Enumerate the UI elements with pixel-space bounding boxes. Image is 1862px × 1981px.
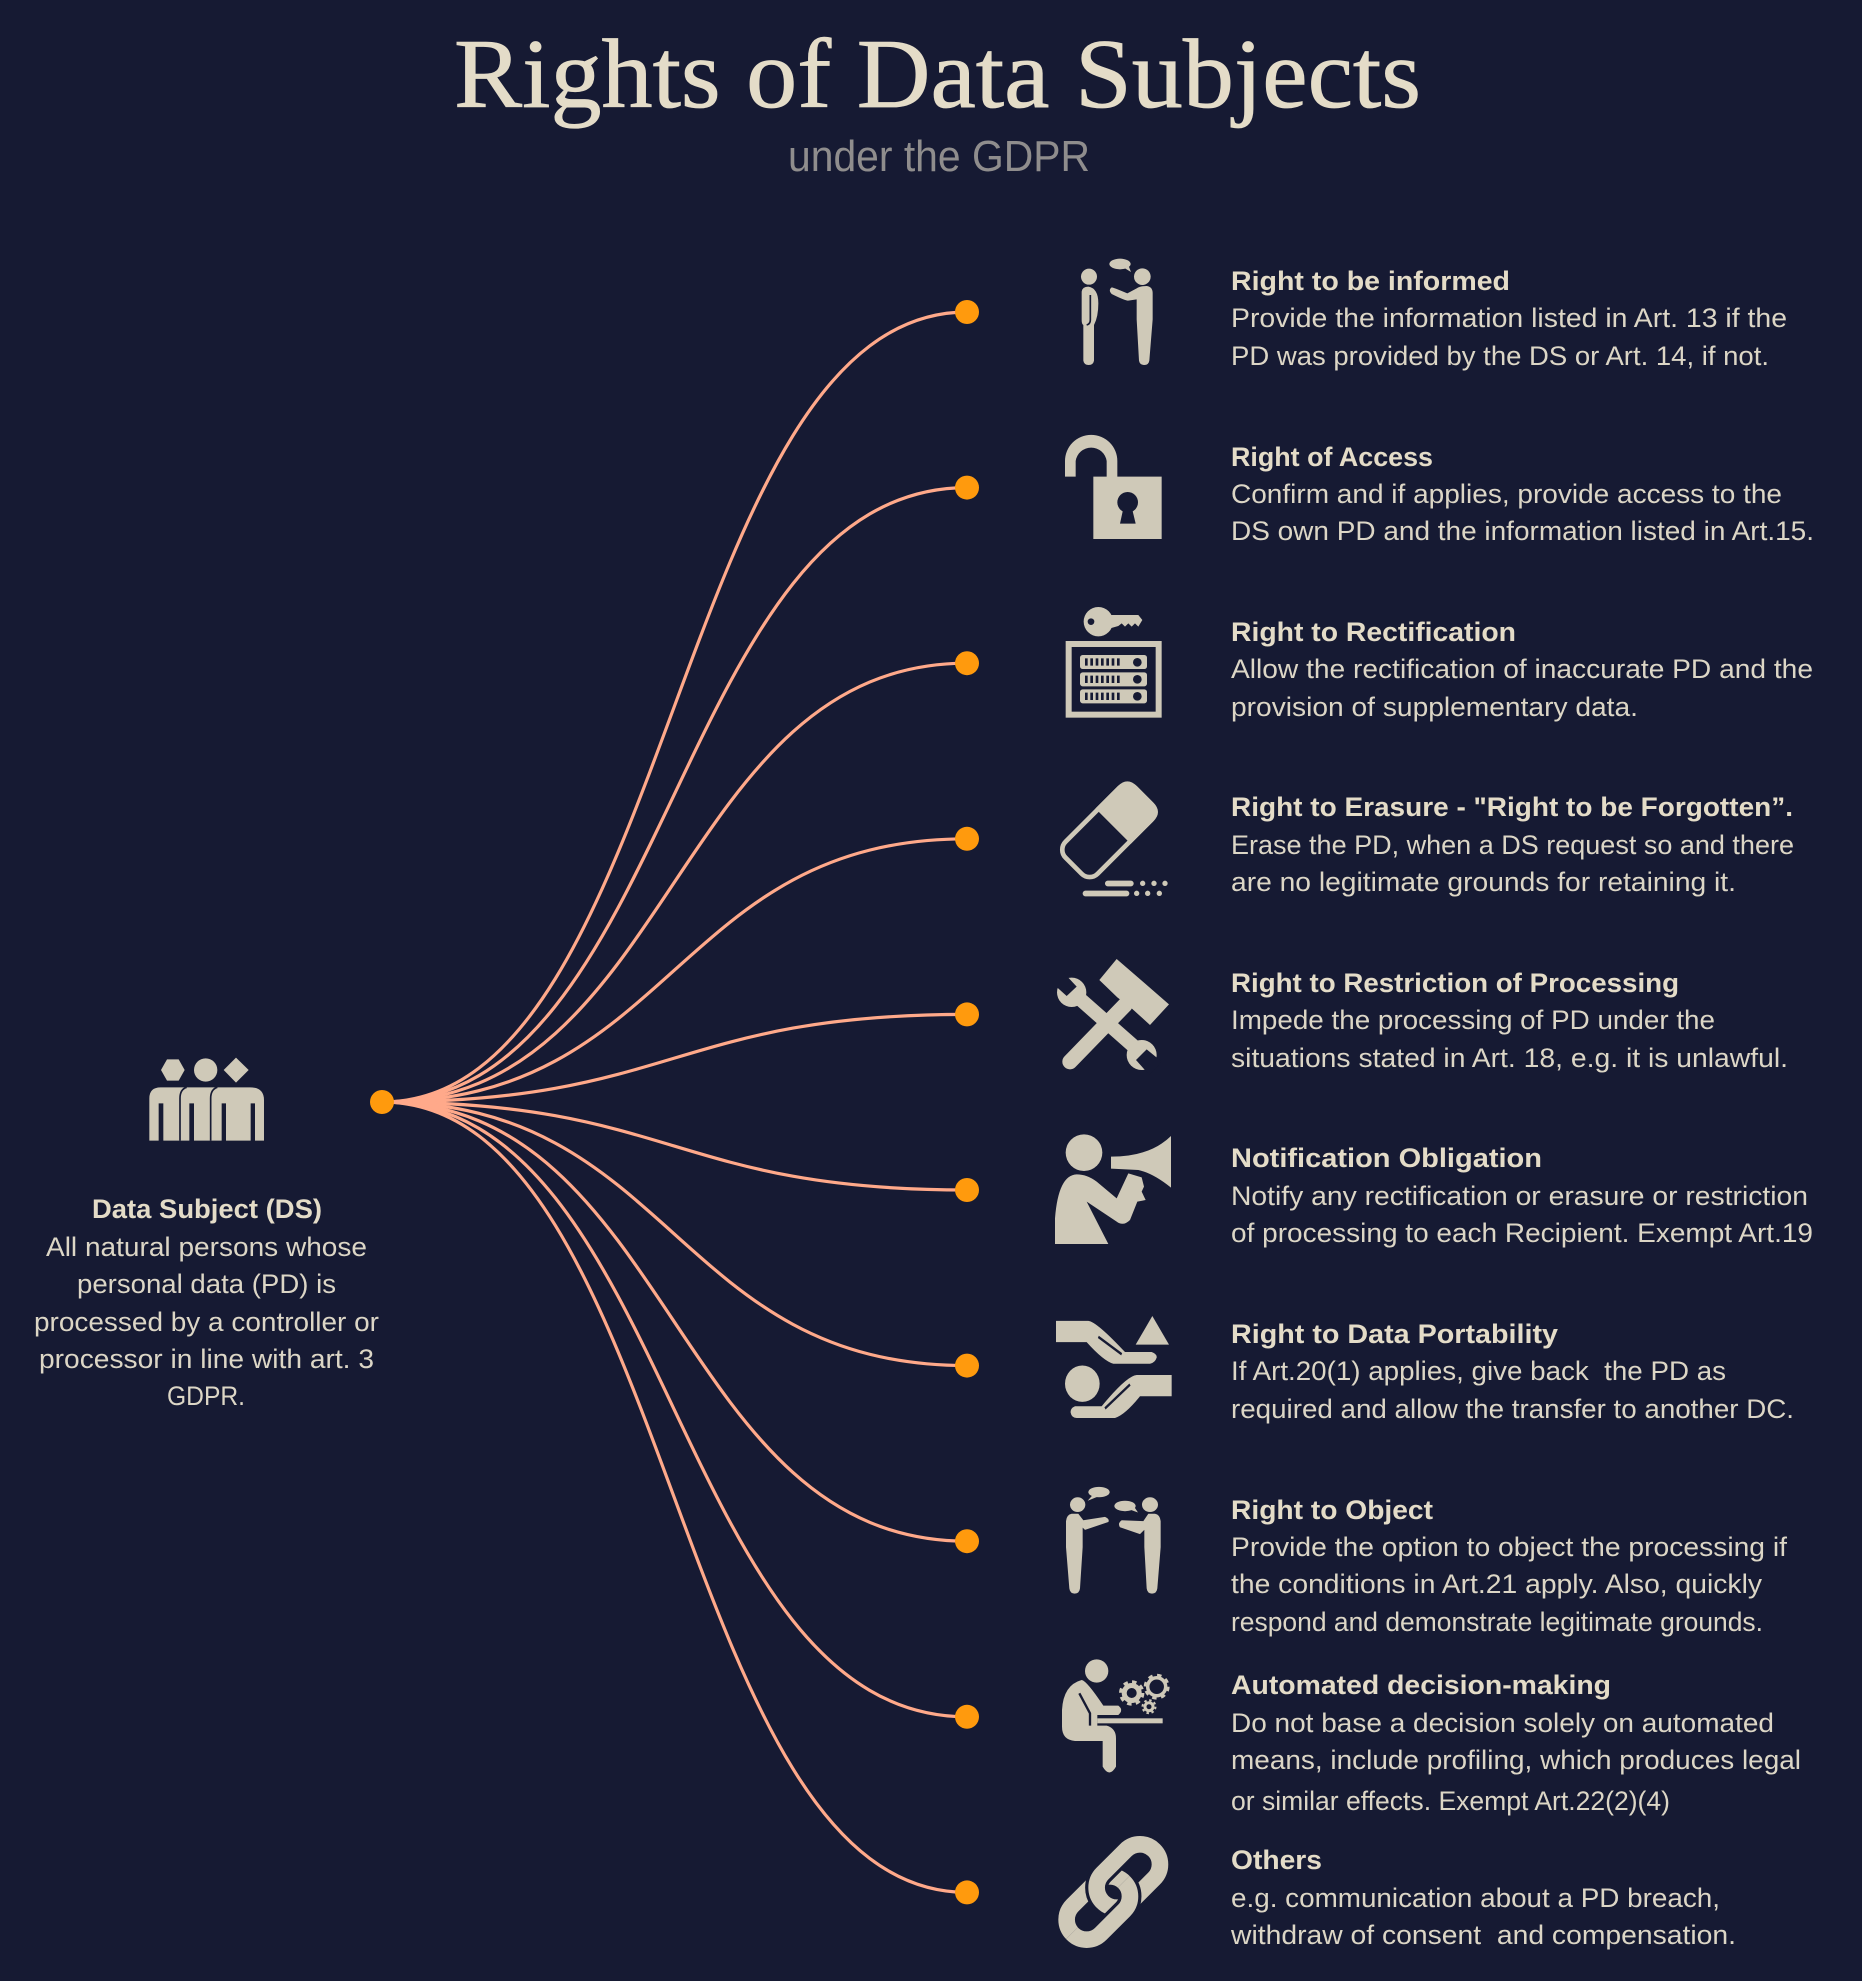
icon: two people talking [1081,259,1153,365]
heading: Right to Data Portability [1231,1319,1558,1349]
panel: notification obligation [1055,1134,1813,1248]
description: Provide the option to object the processing if [1231,1532,1788,1562]
heading: Right of Access [1231,442,1433,472]
panel: right to rectification [1069,607,1813,722]
description: or similar effects. Exempt Art.22(2)(4) [1231,1786,1670,1816]
panel: others [1058,1836,1736,1950]
description: Erase the PD, when a DS request so and there [1231,830,1794,860]
data subject description: All natural persons whose [46,1232,367,1262]
description: withdraw of consent and compensation. [1230,1920,1736,1950]
description: the conditions in Art.21 apply. Also, quickly [1231,1569,1763,1599]
heading: Notification Obligation [1231,1143,1542,1173]
icon: group of people [149,1058,264,1141]
panel: right to data portability [1056,1316,1794,1424]
panel: right to be informed [1081,259,1787,371]
description: Do not base a decision solely on automated [1231,1708,1774,1738]
description: If Art.20(1) applies, give back the PD as [1231,1356,1726,1386]
panel: automated decision-making [1062,1659,1801,1816]
icon: two people arguing [1066,1487,1161,1594]
description: of processing to each Recipient. Exempt Art.19 [1231,1218,1813,1248]
heading: Right to be informed [1231,266,1510,296]
panel: right to erasure [1056,777,1794,897]
icon: chain link [1058,1836,1168,1948]
description: e.g. communication about a PD breach, [1231,1883,1720,1913]
description: provision of supplementary data. [1231,692,1638,722]
icon: key and server [1069,607,1159,715]
heading: Others [1231,1845,1322,1875]
panel: data subject [34,1058,379,1411]
description: Impede the processing of PD under the [1231,1005,1715,1035]
heading: Right to Erasure - "Right to be Forgotten”. [1231,792,1793,822]
description [1231,1005,1788,1073]
description [1231,479,1814,546]
description: Provide the information listed in Art. 13 if the [1231,303,1787,333]
description: Notify any rectification or erasure or restriction [1231,1181,1808,1211]
icon: open padlock [1065,435,1162,539]
icon: person with megaphone [1055,1134,1171,1244]
description: are no legitimate grounds for retaining it. [1231,867,1736,897]
data subject heading: Data Subject (DS) [92,1194,322,1224]
panel: right to object [1066,1487,1788,1637]
description: Allow the rectification of inaccurate PD and the [1231,654,1813,684]
heading: Right to Rectification [1231,617,1516,647]
description [1231,654,1813,722]
data subject description: processed by a controller or [34,1307,379,1337]
connector curves [382,312,967,1892]
panel: right of access [1065,435,1814,546]
description: required and allow the transfer to another DC. [1231,1394,1794,1424]
heading: Automated decision-making [1231,1670,1611,1700]
description: DS own PD and the information listed in Art.15. [1231,516,1814,546]
title: Rights of Data Subjects [454,20,1421,129]
heading: Right to Object [1231,1495,1433,1525]
description: PD was provided by the DS or Art. 14, if not. [1231,341,1769,371]
icon: hands exchanging data [1056,1316,1172,1418]
description: Confirm and if applies, provide access to the [1231,479,1782,509]
description [1231,1708,1801,1816]
description: respond and demonstrate legitimate grounds. [1231,1607,1763,1637]
icon: seated person with gears [1062,1659,1168,1772]
heading: Right to Restriction of Processing [1231,968,1679,998]
description [1230,1883,1736,1950]
description [1231,830,1794,897]
data subject description [34,1232,379,1411]
data subject description: GDPR. [167,1381,245,1411]
connector dots [370,300,979,1904]
data subject description: personal data (PD) is [77,1269,336,1299]
data subject description: processor in line with art. 3 [39,1344,374,1374]
panel: right to restriction of processing [1053,959,1788,1075]
icon: hammer and wrench [1053,959,1169,1075]
icon: eraser [1056,777,1168,896]
description [1231,1356,1794,1424]
description [1231,1532,1788,1637]
description [1231,303,1787,371]
description: situations stated in Art. 18, e.g. it is unlawful. [1231,1043,1788,1073]
description [1231,1181,1813,1248]
description: means, include profiling, which produces legal [1231,1745,1801,1775]
subtitle: under the GDPR [788,132,1090,181]
